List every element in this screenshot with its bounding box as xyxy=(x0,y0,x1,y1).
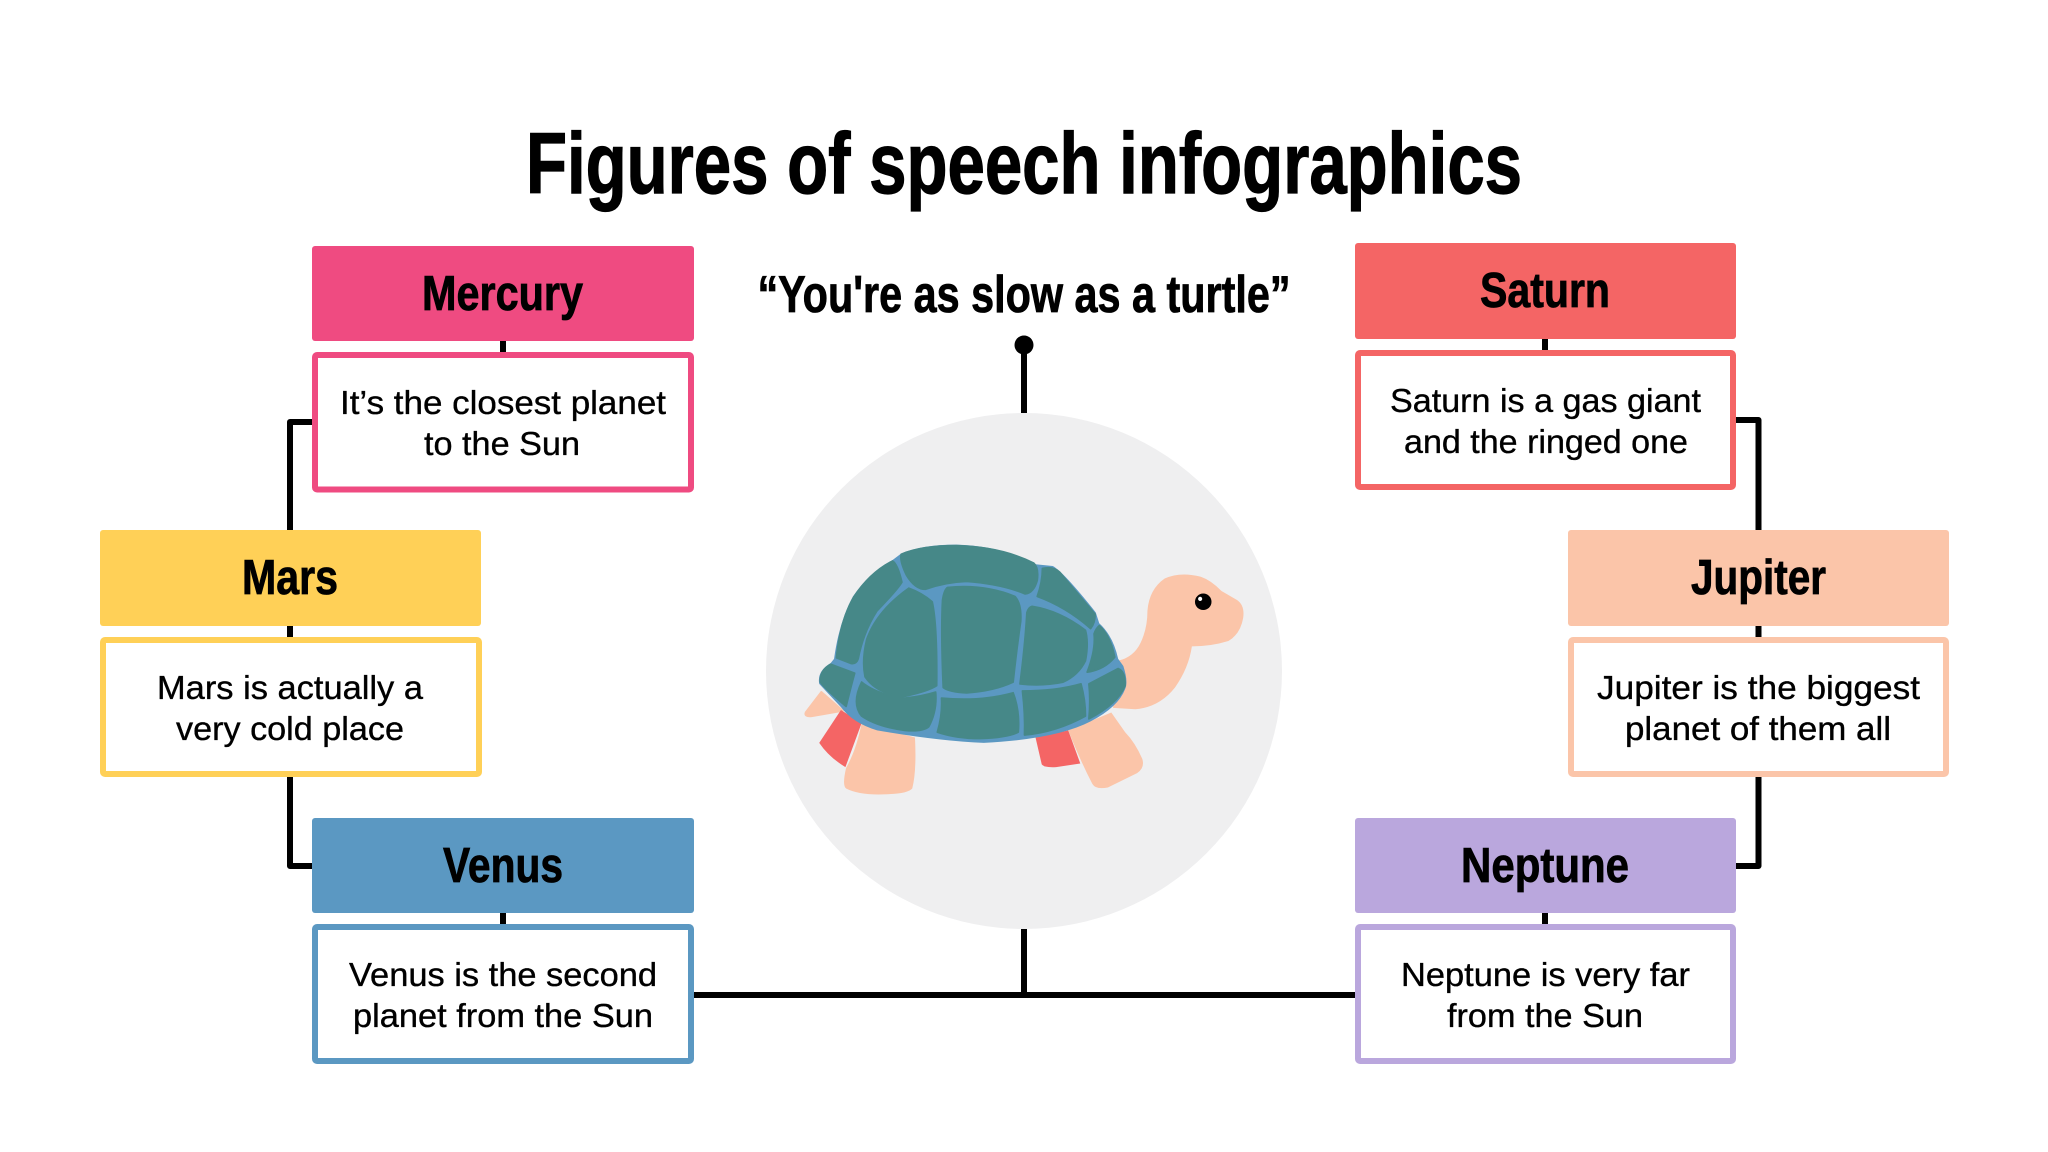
panel: Venus xyxy=(312,818,694,1061)
heading: Venus: Venus xyxy=(443,839,563,893)
title: Figures of speech infographics xyxy=(526,116,1522,212)
panel: Saturn xyxy=(1355,243,1736,487)
text block: Saturn xyxy=(1358,353,1733,487)
text block: Neptune xyxy=(1358,927,1733,1061)
icon: turtle xyxy=(805,545,1244,794)
heading: Mercury xyxy=(312,246,694,341)
heading: Mars: Mars xyxy=(242,551,338,605)
heading: Neptune xyxy=(1355,818,1736,913)
text block: Mercury: It’s the closest planet xyxy=(340,384,666,421)
heading: Mercury: Mercury xyxy=(422,267,583,321)
text block: Venus xyxy=(315,927,691,1061)
panel: Neptune xyxy=(1355,818,1736,1061)
panel: Mars xyxy=(100,530,481,774)
text block: Jupiter: planet of them all xyxy=(1625,710,1891,747)
text block: Neptune: Neptune is very far xyxy=(1401,956,1690,993)
text block: Jupiter: Jupiter is the biggest xyxy=(1597,669,1920,706)
text block: Venus: planet from the Sun xyxy=(353,997,653,1034)
connector lines xyxy=(290,336,1758,995)
panel: Jupiter xyxy=(1568,530,1949,774)
text block: Venus: Venus is the second xyxy=(349,956,657,993)
heading: Saturn xyxy=(1355,243,1736,339)
circle backdrop xyxy=(766,413,1282,929)
heading: Jupiter xyxy=(1568,530,1949,626)
text block: Mars xyxy=(103,640,479,774)
heading: Jupiter: Jupiter xyxy=(1691,551,1826,605)
text block: Mercury xyxy=(315,355,691,490)
heading: Neptune: Neptune xyxy=(1461,839,1629,893)
quote: “You're as slow as a turtle” xyxy=(758,266,1290,324)
text block: Mars: very cold place xyxy=(176,710,404,747)
text block: Mercury: to the Sun xyxy=(424,425,580,462)
heading: Venus xyxy=(312,818,694,913)
text block: Saturn: Saturn is a gas giant xyxy=(1390,382,1701,419)
text block: Saturn: and the ringed one xyxy=(1404,423,1688,460)
heading: Saturn: Saturn xyxy=(1480,264,1610,318)
text block: Mars: Mars is actually a xyxy=(157,669,424,706)
text block: Neptune: from the Sun xyxy=(1447,997,1643,1034)
text block: Jupiter xyxy=(1571,640,1946,774)
heading: Mars xyxy=(100,530,481,626)
panel: Mercury xyxy=(312,246,694,490)
